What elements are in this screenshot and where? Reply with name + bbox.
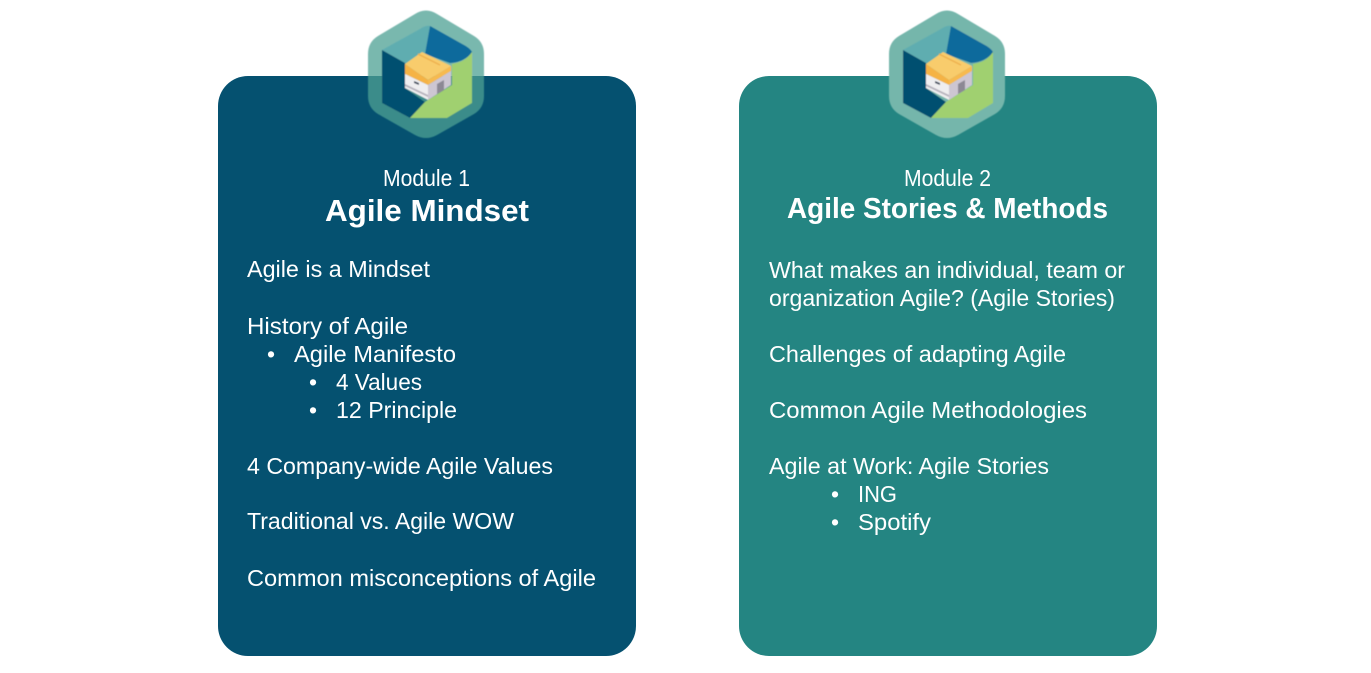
- label: module number: Module 2: [904, 165, 991, 191]
- text block: module 1 topics: 12 Principle: [336, 397, 457, 423]
- text block: module 1 topics: Agile is a Mindset: [247, 256, 431, 282]
- panel background: [218, 76, 636, 656]
- label: module number: Module 1: [383, 165, 470, 191]
- text block: module 2 topics: Common Agile Methodologies: [769, 397, 1087, 423]
- text block: module 1 topics: History of Agile: [247, 313, 408, 339]
- text block: module 1 topics: •: [309, 369, 317, 395]
- text block: module 1 topics: Agile Manifesto: [294, 341, 456, 367]
- text block: module 2 topics: organization Agile? (Agile Stories): [769, 285, 1115, 311]
- panel: module 1: [218, 10, 636, 656]
- text block: module 1 topics: •: [267, 341, 275, 367]
- text block: module 2 topics: Spotify: [858, 509, 932, 535]
- text block: module 1 topics: Traditional vs. Agile WOW: [247, 508, 514, 534]
- text block: module 2 topics: [769, 257, 1125, 535]
- icon: hexagon with box: [368, 10, 484, 138]
- text block: module 2 topics: Challenges of adapting Agile: [769, 341, 1066, 367]
- text block: module 1 topics: Common misconceptions of Agile: [247, 565, 596, 591]
- text block: module 2 topics: ING: [858, 481, 897, 507]
- text block: module 2 topics: •: [831, 509, 839, 535]
- text block: module 2 topics: Agile at Work: Agile Stories: [769, 453, 1049, 479]
- heading: module title: Agile Stories & Methods: [787, 193, 1108, 225]
- text block: module 2 topics: •: [831, 481, 839, 507]
- text block: module 1 topics: 4 Company-wide Agile Values: [247, 453, 553, 479]
- heading: module title: Agile Mindset: [325, 193, 529, 228]
- text block: module 1 topics: •: [309, 397, 317, 423]
- panel background: [739, 76, 1157, 656]
- text block: module 2 topics: What makes an individual, team or: [769, 257, 1125, 283]
- panel: module 2: [739, 10, 1157, 656]
- text block: module 1 topics: [247, 256, 596, 591]
- text block: module 1 topics: 4 Values: [336, 369, 422, 395]
- icon: hexagon with box: [889, 10, 1005, 138]
